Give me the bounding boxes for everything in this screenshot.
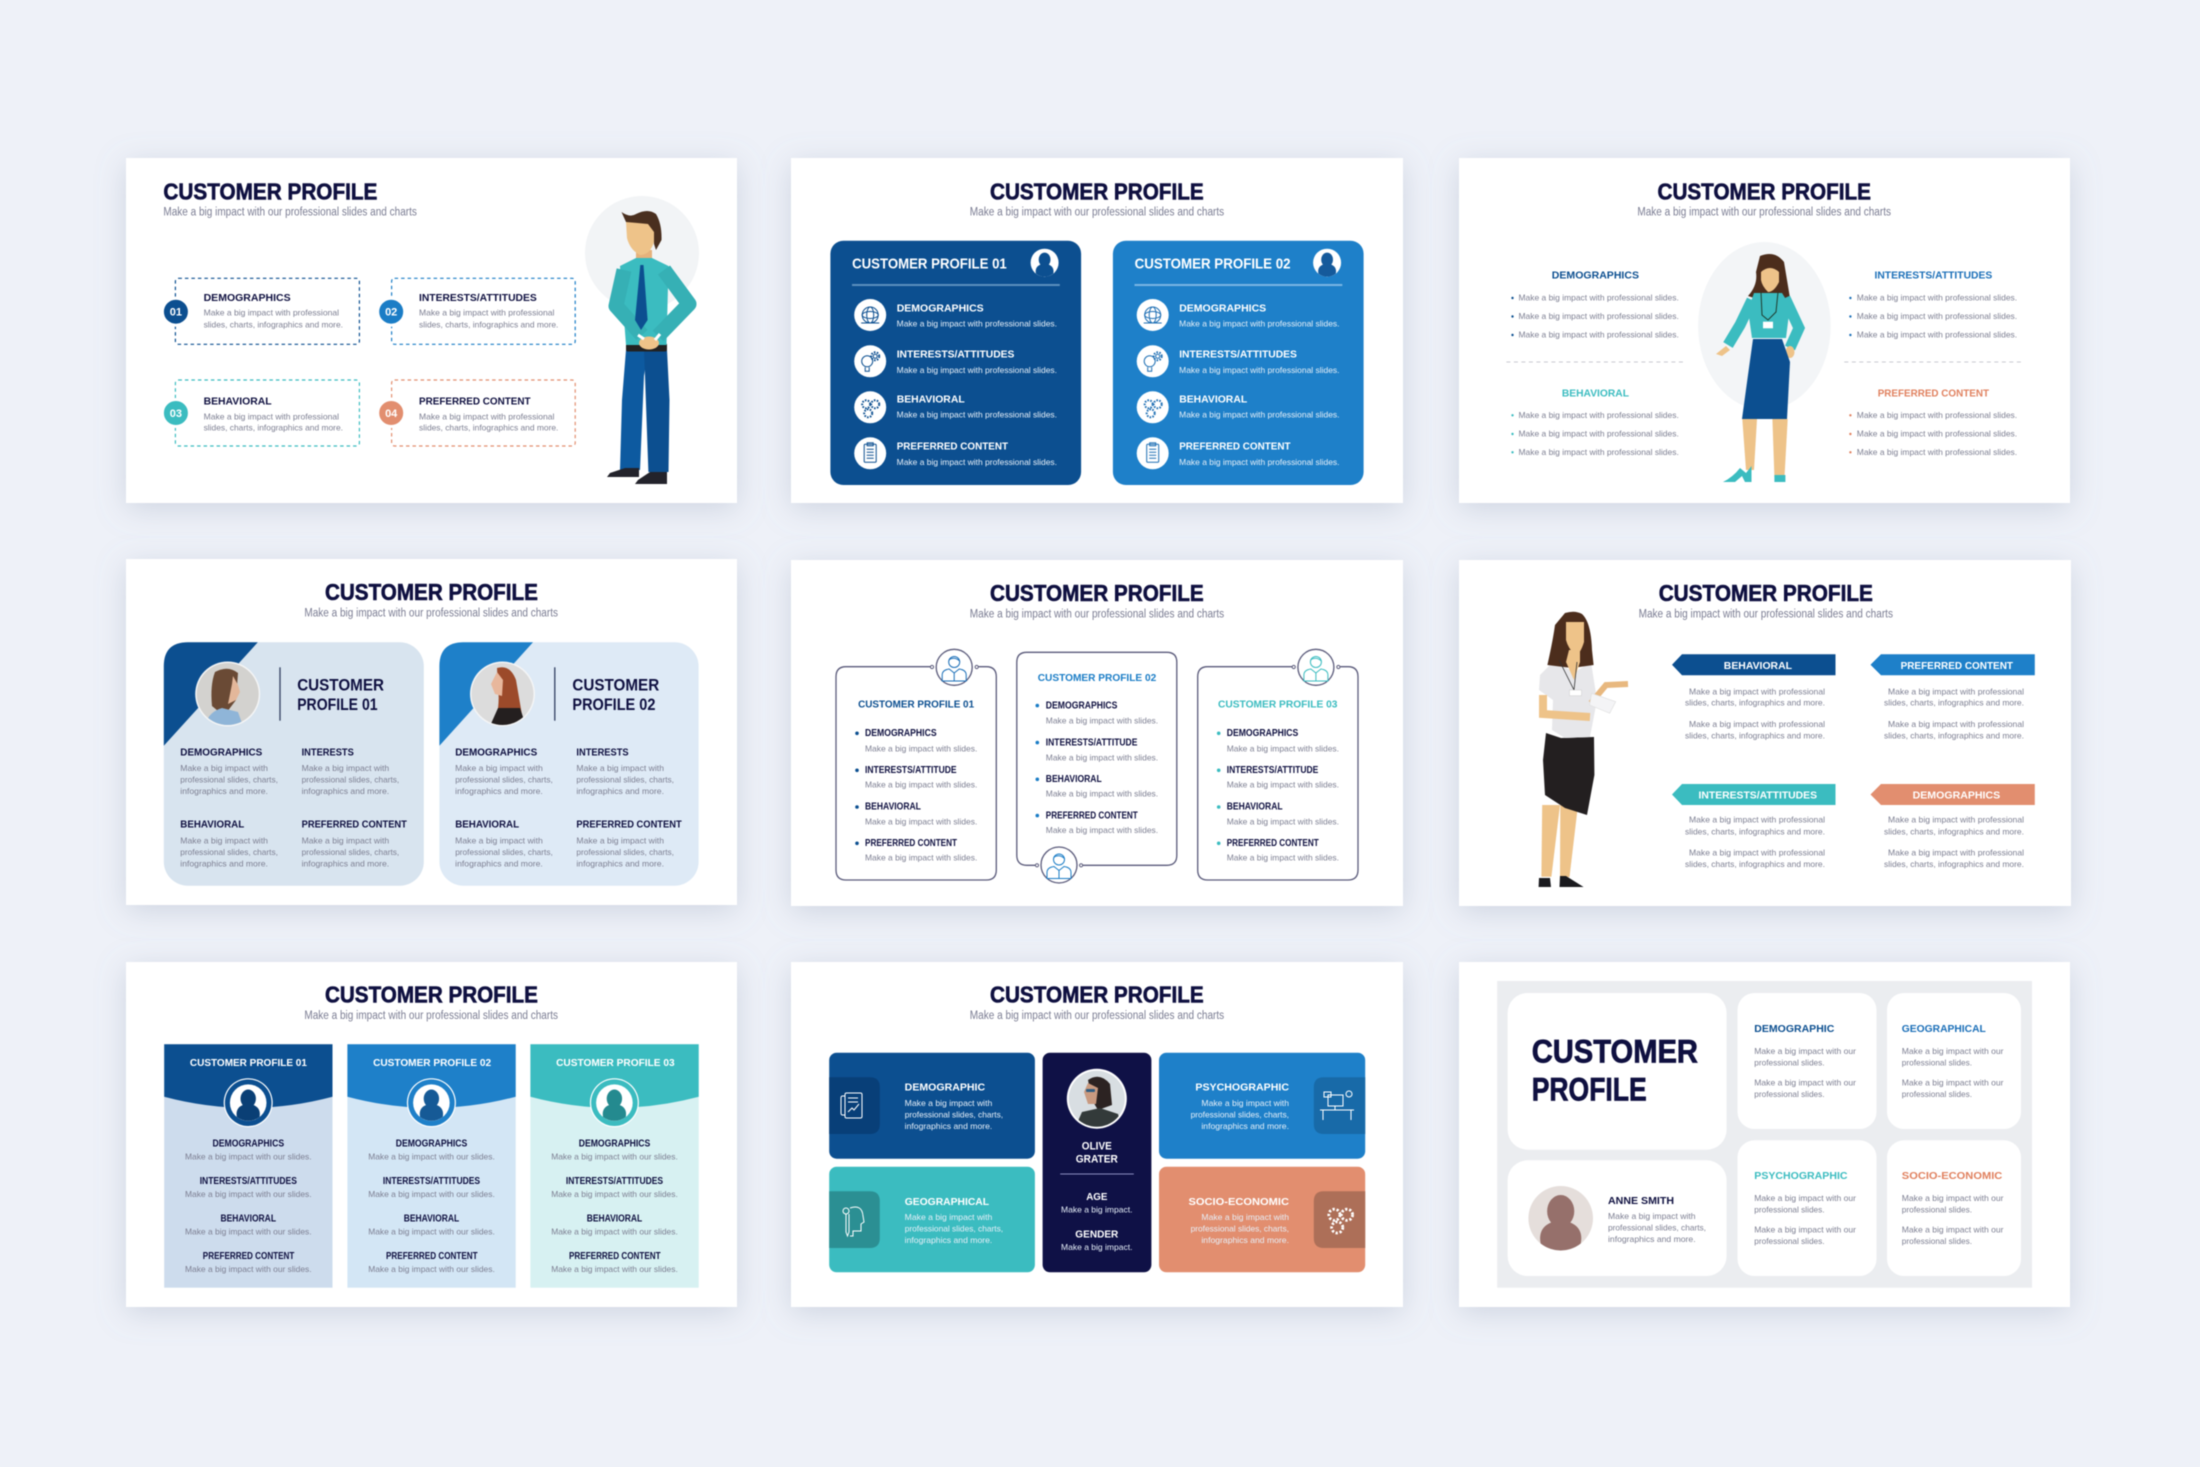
card: geographical: Make a big impact with our	[1902, 1046, 2004, 1056]
column: profile 02: Make a big impact with our slides.	[368, 1151, 495, 1161]
tile: demographic: DEMOGRAPHIC	[905, 1082, 986, 1094]
card: demographics: DEMOGRAPHICS	[204, 292, 291, 304]
card: outlined profile 01	[836, 649, 996, 880]
column: profile 02: CUSTOMER PROFILE 02	[373, 1057, 491, 1069]
card: customer profile 01: PREFERRED CONTENT	[897, 441, 1009, 453]
tile: persona: Make a big impact.	[1061, 1204, 1132, 1214]
list: interests: Make a big impact with professional slides.	[1857, 330, 2017, 340]
card: outlined profile 02	[1017, 652, 1177, 883]
tile: socio-economic: professional slides, charts,	[1191, 1224, 1289, 1234]
card: profile 02: infographics and more.	[455, 786, 543, 796]
card: customer profile 01: Make a big impact with professional slides.	[897, 457, 1057, 467]
card: psychographic: Make a big impact with our	[1754, 1225, 1856, 1235]
card: profile 01: PROFILE 01	[297, 695, 378, 714]
column: profile 03	[530, 1044, 699, 1288]
title: CUSTOMER PROFILE	[990, 981, 1204, 1007]
card: outlined profile 01: Make a big impact with slides.	[865, 743, 977, 753]
card: interests: INTERESTS/ATTITUDES	[419, 292, 537, 304]
card: profile 01	[164, 642, 424, 886]
card: profile 01: infographics and more.	[180, 859, 268, 869]
card: preferred content: PREFERRED CONTENT	[419, 395, 531, 407]
ribbon: interests: INTERESTS/ATTITUDES	[1698, 790, 1817, 802]
card: anne smith: Make a big impact with	[1608, 1211, 1696, 1221]
photo: woman in denim	[194, 660, 260, 727]
tile: socio-economic: Make a big impact with	[1201, 1212, 1289, 1222]
card: profile 02: infographics and more.	[455, 859, 543, 869]
ribbon: behavioral: slides, charts, infographics and more.	[1685, 730, 1825, 740]
ribbon: interests: slides, charts, infographics and more.	[1685, 826, 1825, 836]
tile: demographic: Make a big impact with	[905, 1098, 993, 1108]
column: profile 03: Make a big impact with our slides.	[551, 1151, 678, 1161]
ribbon: preferred content: PREFERRED CONTENT	[1901, 660, 2014, 672]
list: behavioral: Make a big impact with professional slides.	[1518, 410, 1679, 420]
card: demographic: professional slides.	[1754, 1057, 1825, 1067]
card: demographic	[1738, 993, 1876, 1129]
ribbon: demographics: Make a big impact with professional	[1888, 847, 2024, 857]
title: CUSTOMER PROFILE	[163, 178, 377, 204]
card: preferred content: 04	[385, 408, 398, 420]
card: interests: 02	[385, 307, 397, 319]
ribbon: behavioral: Make a big impact with professional	[1689, 719, 1825, 729]
tile: geographical: Make a big impact with	[905, 1212, 993, 1222]
list: interests	[1849, 270, 2017, 340]
card: behavioral: BEHAVIORAL	[204, 395, 272, 407]
card: profile 02: INTERESTS	[576, 746, 629, 758]
title: CUSTOMER PROFILE	[325, 981, 538, 1007]
tile: psychographic: professional slides, charts,	[1191, 1110, 1289, 1120]
illustration: woman in teal blouse	[1698, 242, 1831, 482]
list: preferred content: PREFERRED CONTENT	[1878, 387, 1990, 399]
list: preferred content: Make a big impact with professional slides.	[1857, 429, 2017, 439]
panel: slide 7 three columns	[126, 962, 737, 1307]
tile: persona: AGE	[1086, 1191, 1108, 1203]
subtitle: Make a big impact with our professional slides and charts	[970, 609, 1224, 621]
ribbon: demographics: Make a big impact with professional	[1888, 815, 2024, 825]
card: profile 02: Make a big impact with	[455, 763, 543, 773]
ribbon: preferred content: slides, charts, infographics and more.	[1884, 730, 2024, 740]
ribbon: interests: slides, charts, infographics and more.	[1685, 859, 1825, 869]
ribbon: behavioral: BEHAVIORAL	[1724, 660, 1793, 672]
title: CUSTOMER PROFILE	[325, 579, 538, 605]
card: profile 02: professional slides, charts,	[455, 775, 553, 785]
card: outlined profile 01: INTERESTS/ATTITUDE	[865, 764, 957, 776]
card: outlined profile 01: PREFERRED CONTENT	[865, 837, 957, 849]
column: profile 03: INTERESTS/ATTITUDES	[566, 1175, 663, 1187]
card: geographical: professional slides.	[1902, 1089, 1972, 1099]
card: profile 01: Make a big impact with	[302, 836, 390, 846]
column: profile 03: PREFERRED CONTENT	[569, 1250, 661, 1262]
column: profile 03: BEHAVIORAL	[587, 1212, 643, 1224]
card: socio-economic: professional slides.	[1902, 1204, 1972, 1214]
column: profile 01: Make a big impact with our slides.	[185, 1189, 312, 1199]
card: demographics: 01	[170, 307, 182, 319]
card: profile 01: professional slides, charts,	[180, 775, 278, 785]
list: demographics	[1511, 270, 1679, 340]
subtitle: Make a big impact with our professional slides and charts	[1637, 207, 1891, 219]
card: socio-economic: Make a big impact with our	[1902, 1225, 2004, 1235]
card: psychographic: PSYCHOGRAPHIC	[1754, 1170, 1848, 1182]
card: big title	[1508, 993, 1727, 1150]
subtitle: Make a big impact with our professional slides and charts	[304, 608, 558, 620]
tile: demographic	[829, 1053, 1035, 1159]
ribbon: behavioral	[1672, 654, 1836, 740]
card: profile 02: PROFILE 02	[572, 695, 655, 714]
list: behavioral: BEHAVIORAL	[1562, 387, 1630, 399]
ribbon: demographics: slides, charts, infographics and more.	[1884, 826, 2024, 836]
card: behavioral: 03	[170, 408, 182, 420]
panel: slide 2 two blue profile cards	[791, 158, 1403, 503]
card: customer profile 02: CUSTOMER PROFILE 02	[1135, 255, 1291, 272]
column: profile 01: Make a big impact with our slides.	[185, 1151, 312, 1161]
card: profile 01: professional slides, charts,	[302, 775, 399, 785]
column: profile 02: DEMOGRAPHICS	[396, 1137, 467, 1149]
ribbon: interests: Make a big impact with professional	[1689, 847, 1825, 857]
panel: slide 6 presenter with ribbons	[1459, 560, 2071, 906]
card: profile 01: INTERESTS	[302, 746, 354, 758]
title: CUSTOMER PROFILE	[990, 580, 1204, 606]
tile: socio-economic: infographics and more.	[1201, 1235, 1289, 1245]
tile: geographical	[829, 1167, 1035, 1272]
card: profile 02: professional slides, charts,	[455, 847, 553, 857]
card: profile 01: infographics and more.	[302, 859, 389, 869]
tile: socio-economic	[1159, 1167, 1365, 1272]
card: outlined profile 02: Make a big impact with slides.	[1046, 789, 1158, 799]
card: outlined profile 01: CUSTOMER PROFILE 01	[858, 698, 974, 710]
title: CUSTOMER PROFILE	[990, 178, 1204, 204]
column: profile 02: Make a big impact with our slides.	[368, 1226, 495, 1236]
card: outlined profile 01: Make a big impact with slides.	[865, 780, 977, 790]
card: outlined profile 03: Make a big impact with slides.	[1227, 780, 1339, 790]
card: profile 01: PREFERRED CONTENT	[302, 819, 407, 831]
card: outlined profile 01: Make a big impact with slides.	[865, 853, 977, 863]
card: outlined profile 03: CUSTOMER PROFILE 03	[1218, 698, 1338, 710]
tile: psychographic	[1159, 1053, 1365, 1159]
card: profile 01: BEHAVIORAL	[180, 819, 245, 831]
column: profile 01: Make a big impact with our slides.	[185, 1226, 312, 1236]
ribbon: preferred content	[1870, 654, 2035, 740]
card: profile 01: DEMOGRAPHICS	[180, 746, 262, 758]
card: customer profile 01: Make a big impact with professional slides.	[897, 410, 1057, 420]
ribbon: demographics: DEMOGRAPHICS	[1913, 790, 2000, 802]
card: outlined profile 02: Make a big impact with slides.	[1046, 752, 1158, 762]
card: anne smith	[1508, 1160, 1727, 1276]
card: anne smith: ANNE SMITH	[1608, 1195, 1674, 1207]
card: outlined profile 02: DEMOGRAPHICS	[1046, 699, 1117, 711]
column: profile 03: Make a big impact with our slides.	[551, 1226, 678, 1236]
column: profile 01: CUSTOMER PROFILE 01	[190, 1057, 307, 1069]
tile: demographic: infographics and more.	[905, 1121, 992, 1131]
card: outlined profile 03: BEHAVIORAL	[1227, 801, 1283, 813]
card: geographical: Make a big impact with our	[1902, 1078, 2004, 1088]
card: socio-economic: Make a big impact with our	[1902, 1193, 2004, 1203]
card: socio-economic	[1887, 1140, 2021, 1276]
list: preferred content	[1849, 387, 2017, 457]
tile: demographic: professional slides, charts,	[905, 1110, 1003, 1120]
card: profile 02: PREFERRED CONTENT	[576, 819, 682, 831]
ribbon: behavioral: Make a big impact with professional	[1689, 686, 1825, 696]
card: anne smith: infographics and more.	[1608, 1234, 1696, 1244]
card: preferred content	[378, 380, 575, 446]
card: customer profile 01: Make a big impact with professional slides.	[897, 319, 1057, 329]
ribbon: demographics: slides, charts, infographics and more.	[1884, 859, 2024, 869]
card: socio-economic: professional slides.	[1902, 1236, 1972, 1246]
card: behavioral: Make a big impact with professional	[204, 411, 339, 421]
panel: slide 9 bento cards on grey	[1459, 962, 2070, 1307]
list: interests: INTERESTS/ATTITUDES	[1874, 270, 1992, 282]
card: profile 02: infographics and more.	[576, 859, 664, 869]
subtitle: Make a big impact with our professional slides and charts	[1639, 609, 1893, 621]
column: profile 02: PREFERRED CONTENT	[386, 1250, 478, 1262]
tile: persona: OLIVE	[1082, 1140, 1112, 1152]
column: profile 03: CUSTOMER PROFILE 03	[556, 1057, 675, 1069]
panel: slide 1 four dashed boxes with man	[126, 158, 737, 503]
card: interests: Make a big impact with professional	[419, 308, 555, 318]
panel: slide 5 three outlined profile cards	[791, 560, 1403, 906]
card: socio-economic: SOCIO-ECONOMIC	[1902, 1170, 2003, 1182]
card: demographic: Make a big impact with our	[1754, 1078, 1856, 1088]
card: profile 02: CUSTOMER	[572, 676, 659, 695]
card: interests: slides, charts, infographics and more.	[419, 319, 558, 329]
card: profile 01: infographics and more.	[180, 786, 268, 796]
tile: persona	[1043, 1053, 1151, 1272]
card: psychographic: Make a big impact with our	[1754, 1193, 1856, 1203]
card: psychographic: professional slides.	[1754, 1204, 1825, 1214]
card: profile 01: Make a big impact with	[180, 836, 268, 846]
card: demographic: professional slides.	[1754, 1089, 1825, 1099]
list: demographics: Make a big impact with professional slides.	[1518, 293, 1679, 303]
card: profile 02: Make a big impact with	[576, 836, 664, 846]
column: profile 01	[164, 1044, 332, 1288]
list: demographics: DEMOGRAPHICS	[1552, 270, 1639, 282]
card: outlined profile 02: Make a big impact with slides.	[1046, 825, 1158, 835]
card: profile 01: professional slides, charts,	[302, 847, 399, 857]
card: preferred content: Make a big impact with professional	[419, 411, 555, 421]
card: customer profile 02: Make a big impact with professional slides.	[1179, 319, 1340, 329]
card: customer profile 01: BEHAVIORAL	[897, 394, 965, 406]
ribbon: preferred content: Make a big impact with professional	[1888, 719, 2024, 729]
card: geographical: GEOGRAPHICAL	[1902, 1023, 1986, 1035]
ribbon: interests: Make a big impact with professional	[1689, 815, 1825, 825]
illustration: presenting woman	[1539, 612, 1628, 887]
tile: persona: Make a big impact.	[1061, 1242, 1132, 1252]
column: profile 01: DEMOGRAPHICS	[212, 1137, 284, 1149]
card: preferred content: slides, charts, infographics and more.	[419, 423, 558, 433]
list: behavioral	[1511, 387, 1679, 457]
card: profile 02	[439, 642, 699, 886]
card: customer profile 02: INTERESTS/ATTITUDES	[1179, 349, 1297, 361]
card: outlined profile 01: BEHAVIORAL	[865, 801, 921, 813]
card: outlined profile 02: PREFERRED CONTENT	[1046, 809, 1138, 821]
tile: socio-economic: SOCIO-ECONOMIC	[1188, 1196, 1289, 1208]
card: customer profile 02: Make a big impact with professional slides.	[1179, 410, 1340, 420]
card: psychographic	[1738, 1140, 1876, 1276]
tile: geographical: professional slides, charts,	[905, 1224, 1003, 1234]
list: demographics: Make a big impact with professional slides.	[1518, 311, 1679, 321]
card: behavioral	[162, 380, 359, 446]
list: interests: Make a big impact with professional slides.	[1857, 293, 2017, 303]
card: outlined profile 02: BEHAVIORAL	[1046, 773, 1102, 785]
panel: slide 4 two photo profile cards	[126, 559, 737, 905]
panel: slide 8 four tiles and centre persona	[791, 962, 1403, 1307]
column: profile 02: Make a big impact with our slides.	[368, 1264, 495, 1274]
card: outlined profile 03: INTERESTS/ATTITUDE	[1227, 764, 1318, 776]
card: customer profile 01: Make a big impact with professional slides.	[897, 365, 1057, 375]
card: profile 02: Make a big impact with	[576, 763, 664, 773]
card: customer profile 01: DEMOGRAPHICS	[897, 302, 984, 314]
list: preferred content: Make a big impact with professional slides.	[1857, 410, 2017, 420]
column: profile 01: BEHAVIORAL	[220, 1212, 276, 1224]
card: interests	[378, 278, 575, 344]
photo: woman with sunglasses	[1065, 1068, 1129, 1130]
column: profile 02: BEHAVIORAL	[404, 1212, 460, 1224]
card: demographic: DEMOGRAPHIC	[1754, 1023, 1835, 1035]
list: demographics: Make a big impact with professional slides.	[1518, 330, 1679, 340]
column: profile 01: PREFERRED CONTENT	[203, 1250, 295, 1262]
card: geographical	[1887, 993, 2021, 1129]
card: customer profile 01	[830, 241, 1081, 485]
card: outlined profile 03	[1198, 649, 1358, 880]
card: customer profile 02: PREFERRED CONTENT	[1179, 441, 1291, 453]
card: outlined profile 02: INTERESTS/ATTITUDE	[1046, 736, 1137, 748]
column: profile 03: DEMOGRAPHICS	[579, 1137, 650, 1149]
card: outlined profile 03: PREFERRED CONTENT	[1227, 837, 1319, 849]
card: outlined profile 02: Make a big impact with slides.	[1046, 715, 1158, 725]
tile: psychographic: Make a big impact with	[1201, 1098, 1289, 1108]
ribbon: preferred content: slides, charts, infographics and more.	[1884, 698, 2024, 708]
title: CUSTOMER PROFILE	[1659, 580, 1873, 606]
card: demographics: slides, charts, infographics and more.	[204, 319, 343, 329]
card: customer profile 01: INTERESTS/ATTITUDES	[897, 349, 1014, 361]
card: big title: CUSTOMER	[1532, 1033, 1698, 1069]
card: outlined profile 03: DEMOGRAPHICS	[1227, 727, 1298, 739]
ribbon: demographics	[1870, 784, 2035, 869]
card: customer profile 01: CUSTOMER PROFILE 01	[852, 255, 1007, 272]
card: profile 02: Make a big impact with	[455, 836, 543, 846]
card: demographic: Make a big impact with our	[1754, 1046, 1856, 1056]
card: demographics	[162, 278, 359, 344]
card: outlined profile 03: Make a big impact with slides.	[1227, 853, 1339, 863]
card: customer profile 02	[1113, 241, 1364, 485]
card: customer profile 02: Make a big impact with professional slides.	[1179, 365, 1340, 375]
card: profile 02: professional slides, charts,	[576, 847, 674, 857]
tile: geographical: GEOGRAPHICAL	[905, 1196, 990, 1208]
card: outlined profile 01: DEMOGRAPHICS	[865, 727, 937, 739]
column: profile 01: INTERESTS/ATTITUDES	[200, 1175, 297, 1187]
card: profile 01: professional slides, charts,	[180, 847, 278, 857]
column: profile 03: Make a big impact with our slides.	[551, 1189, 678, 1199]
column: profile 02: Make a big impact with our slides.	[368, 1189, 495, 1199]
card: profile 01: infographics and more.	[302, 786, 389, 796]
illustration: standing man	[585, 196, 699, 484]
card: customer profile 02: BEHAVIORAL	[1179, 394, 1248, 406]
card: profile 02: infographics and more.	[576, 786, 664, 796]
title: CUSTOMER PROFILE	[1658, 178, 1871, 204]
card: demographics: Make a big impact with professional	[204, 308, 339, 318]
tile: persona: GRATER	[1076, 1153, 1118, 1165]
subtitle: Make a big impact with our professional slides and charts	[304, 1010, 558, 1022]
card: geographical: professional slides.	[1902, 1057, 1972, 1067]
tile: persona: GENDER	[1075, 1229, 1119, 1241]
column: profile 02	[347, 1044, 516, 1288]
panel: slide 3 woman with four bullet lists	[1459, 158, 2070, 503]
card: big title: PROFILE	[1532, 1072, 1647, 1108]
ribbon: preferred content: Make a big impact with professional	[1888, 686, 2024, 696]
card: customer profile 02: DEMOGRAPHICS	[1179, 302, 1266, 314]
card: outlined profile 01: Make a big impact with slides.	[865, 816, 977, 826]
tile: psychographic: infographics and more.	[1201, 1121, 1289, 1131]
card: anne smith: professional slides, charts,	[1608, 1222, 1706, 1232]
card: profile 01: CUSTOMER	[297, 676, 384, 695]
card: outlined profile 02: CUSTOMER PROFILE 02	[1038, 672, 1156, 684]
card: profile 02: professional slides, charts,	[576, 775, 674, 785]
list: interests: Make a big impact with professional slides.	[1857, 311, 2017, 321]
column: profile 03: Make a big impact with our slides.	[551, 1264, 678, 1274]
card: outlined profile 03: Make a big impact with slides.	[1227, 816, 1339, 826]
card: customer profile 02: Make a big impact with professional slides.	[1179, 457, 1340, 467]
card: outlined profile 03: Make a big impact with slides.	[1227, 743, 1339, 753]
subtitle: Make a big impact with our professional slides and charts	[970, 207, 1224, 219]
column: profile 02: INTERESTS/ATTITUDES	[383, 1175, 480, 1187]
list: behavioral: Make a big impact with professional slides.	[1518, 447, 1679, 457]
card: profile 01: Make a big impact with	[302, 763, 390, 773]
subtitle: Make a big impact with our professional slides and charts	[970, 1010, 1224, 1022]
ribbon: behavioral: slides, charts, infographics and more.	[1685, 698, 1825, 708]
card: profile 02: BEHAVIORAL	[455, 819, 520, 831]
tile: geographical: infographics and more.	[905, 1235, 992, 1245]
column: profile 01: Make a big impact with our slides.	[185, 1264, 312, 1274]
subtitle: Make a big impact with our professional slides and charts	[163, 207, 417, 219]
list: behavioral: Make a big impact with professional slides.	[1518, 429, 1679, 439]
card: profile 02: DEMOGRAPHICS	[455, 746, 537, 758]
card: profile 01: Make a big impact with	[180, 763, 268, 773]
list: preferred content: Make a big impact with professional slides.	[1857, 447, 2017, 457]
tile: psychographic: PSYCHOGRAPHIC	[1195, 1082, 1289, 1094]
photo: red-haired woman	[469, 660, 535, 726]
card: behavioral: slides, charts, infographics and more.	[204, 423, 343, 433]
card: psychographic: professional slides.	[1754, 1236, 1825, 1246]
ribbon: interests	[1672, 784, 1836, 869]
